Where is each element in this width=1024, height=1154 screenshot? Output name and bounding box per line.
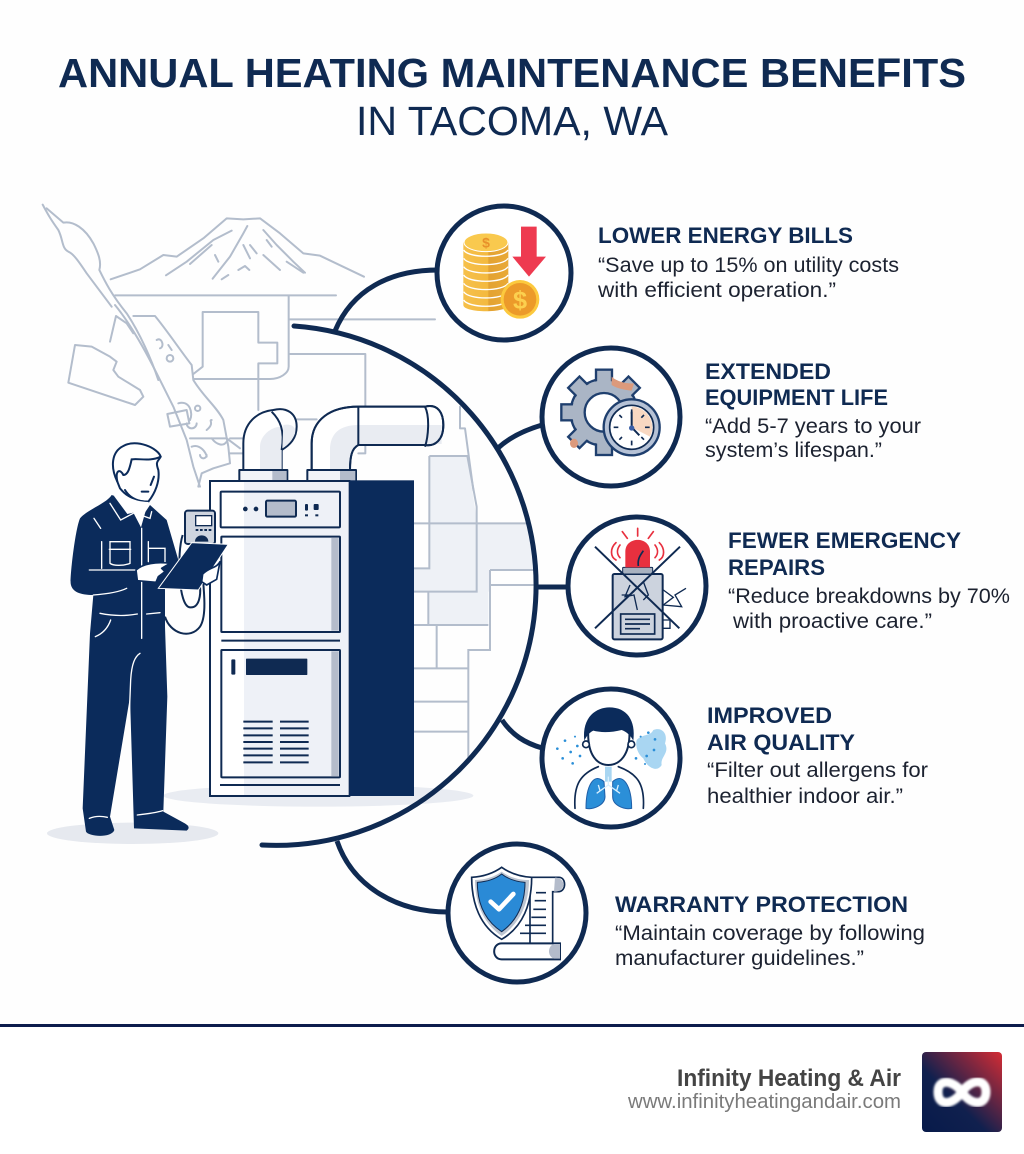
benefit 5: warranty protection xyxy=(448,844,925,982)
benefit 4: improved air quality xyxy=(542,689,928,827)
icon: coins and down arrow xyxy=(437,206,571,340)
tablet xyxy=(158,543,228,590)
floor shadow under furnace xyxy=(163,785,473,807)
text: extended equipment life: system’s lifespan.” xyxy=(705,438,882,462)
text: fewer emergency repairs: “Reduce breakdowns by 70% xyxy=(728,584,1010,608)
footer band xyxy=(0,1024,1024,1154)
hands xyxy=(136,562,220,585)
text: fewer emergency repairs: FEWER EMERGENCY xyxy=(728,528,961,553)
branch connectors xyxy=(335,270,568,912)
furnace illustration xyxy=(163,406,473,807)
text: extended equipment life: EQUIPMENT LIFE xyxy=(705,385,888,410)
cabinet body xyxy=(210,481,349,796)
title: IN TACOMA, WA xyxy=(356,98,669,144)
company name: Infinity Heating & Air xyxy=(677,1065,901,1092)
title: ANNUAL HEATING MAINTENANCE BENEFITS xyxy=(58,50,966,96)
text: improved air quality xyxy=(707,703,928,808)
hair line and facial features xyxy=(117,457,161,502)
text: warranty protection: WARRANTY PROTECTION xyxy=(615,892,908,917)
website: www.infinityheatingandair.com xyxy=(627,1091,901,1113)
text: lower energy bills: with efficient operation.” xyxy=(597,278,836,302)
icon: shield and scroll xyxy=(448,844,586,982)
pale map blocks behind the furnace xyxy=(414,455,534,758)
text: lower energy bills: LOWER ENERGY BILLS xyxy=(598,223,853,248)
title xyxy=(58,50,966,144)
text: warranty protection: manufacturer guidelines.” xyxy=(615,946,864,970)
overalls silhouette xyxy=(71,495,197,836)
large semicircle connector arc xyxy=(262,326,536,845)
benefit 1: lower energy bills xyxy=(437,206,899,340)
floor shadow under technician xyxy=(47,823,218,844)
text: warranty protection: “Maintain coverage by following xyxy=(615,921,925,945)
text: fewer emergency repairs xyxy=(728,528,1010,633)
upper door xyxy=(221,537,340,641)
icon: crossed-out alarm and broken unit xyxy=(568,517,706,655)
text: lower energy bills: “Save up to 15% on utility costs xyxy=(598,253,899,277)
text: improved air quality: “Filter out allergens for xyxy=(707,758,928,782)
map background: Mount Rainier and Puget Sound xyxy=(43,205,473,490)
text: improved air quality: healthier indoor air.” xyxy=(707,784,903,808)
benefit 3: fewer emergency repairs xyxy=(568,517,1010,655)
text: warranty protection xyxy=(615,892,925,970)
text: fewer emergency repairs: REPAIRS xyxy=(728,555,825,580)
cabinet dark side panel xyxy=(349,480,414,796)
text: improved air quality: IMPROVED xyxy=(707,703,832,728)
text: fewer emergency repairs: with proactive care.” xyxy=(732,609,932,633)
benefit 2: extended equipment life xyxy=(542,348,921,486)
icon: gear and clock xyxy=(542,348,680,486)
text: lower energy bills xyxy=(597,223,899,302)
icon: coins and down arrow: $ xyxy=(482,234,490,250)
icon: person with lungs and air particles xyxy=(542,689,680,827)
control panel xyxy=(221,492,340,527)
icon: coins and down arrow: $ xyxy=(513,286,527,314)
logo xyxy=(922,1052,1002,1132)
shirt neck xyxy=(114,491,149,527)
text: extended equipment life: “Add 5-7 years to your xyxy=(705,414,921,438)
exhaust pipes xyxy=(239,406,443,484)
multimeter and cable xyxy=(165,511,215,634)
head xyxy=(113,443,161,502)
uniform detail lines xyxy=(89,503,165,818)
lower door with vents xyxy=(220,650,340,785)
text: extended equipment life xyxy=(705,359,921,462)
text: extended equipment life: EXTENDED xyxy=(705,359,831,384)
text: improved air quality: AIR QUALITY xyxy=(707,730,855,755)
technician figure xyxy=(47,443,228,844)
